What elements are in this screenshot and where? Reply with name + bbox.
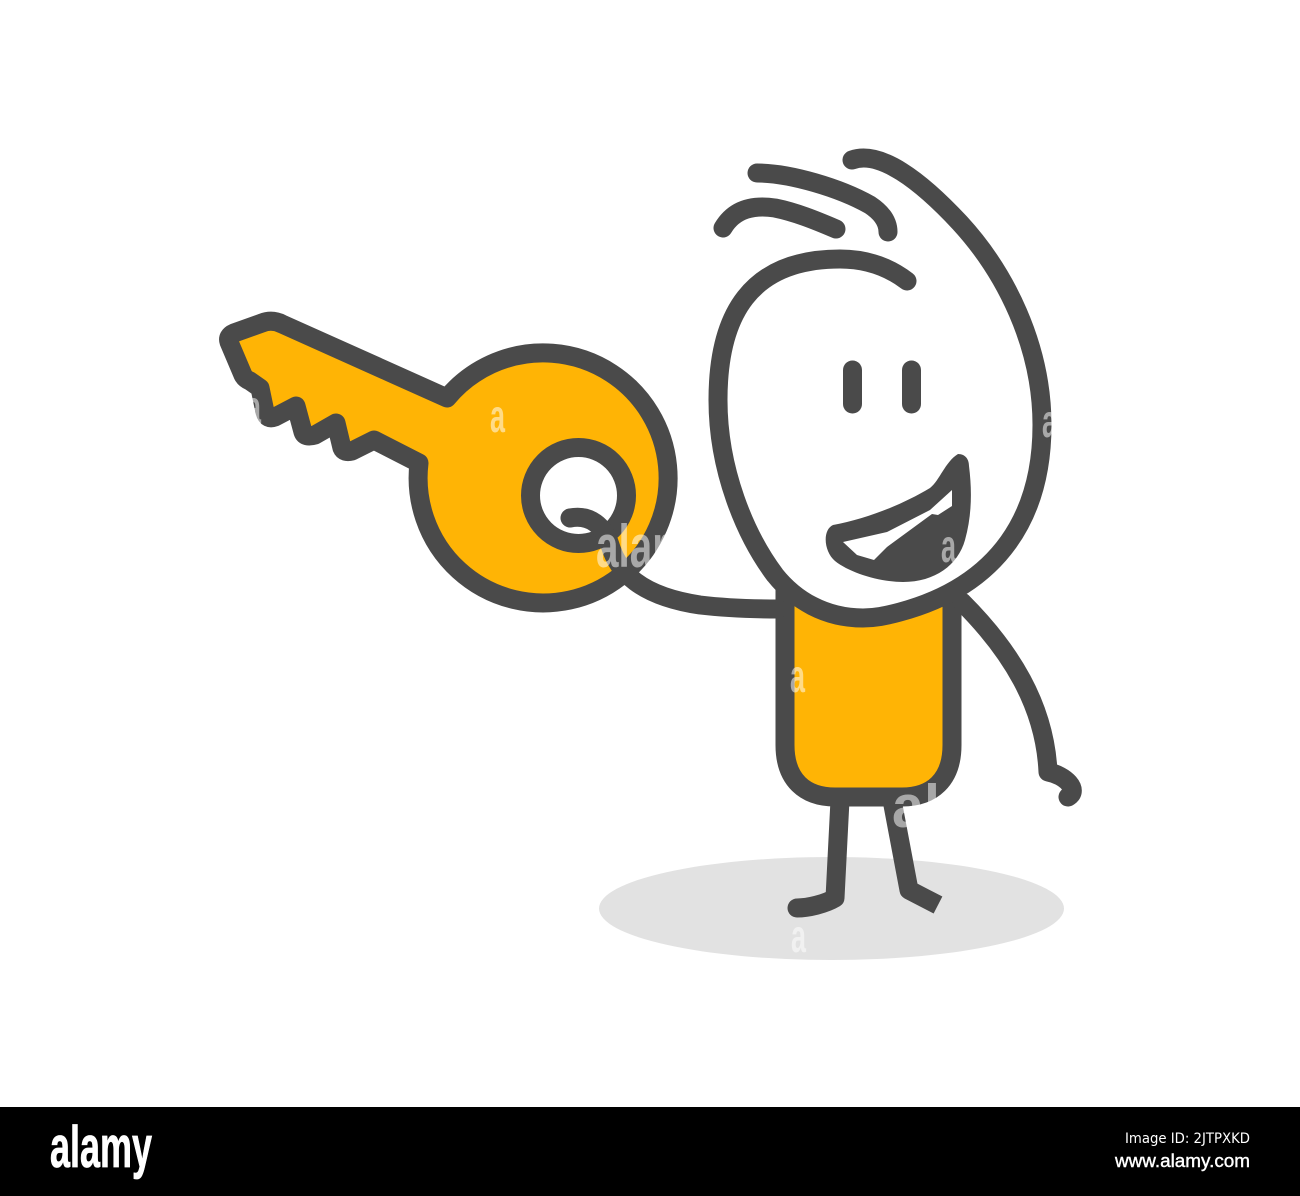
watermark fragments: a [246, 381, 261, 433]
eyes [852, 370, 912, 404]
right arm [962, 602, 1072, 797]
footer bar [0, 1107, 1300, 1196]
key hole [530, 448, 626, 544]
watermark fragments: a [790, 650, 805, 702]
footer logo: alamy [50, 1115, 152, 1180]
watermark fragments [246, 381, 1057, 962]
watermark fragments: alar [596, 513, 668, 580]
ground shadow [599, 857, 1064, 960]
watermark fragments: a [941, 520, 956, 572]
head [718, 158, 1042, 618]
arm holding key [570, 517, 778, 609]
watermark fragments: al [892, 773, 940, 840]
icon: golden key [229, 321, 668, 603]
watermark fragments: a [490, 390, 505, 442]
image id: Image ID: 2JTPXKD [1125, 1131, 1250, 1147]
stick figure [570, 158, 1072, 908]
left leg [797, 800, 840, 908]
hair strands [723, 173, 888, 232]
torso [785, 590, 952, 797]
mouth [826, 454, 971, 582]
website: www.alamy.com [1114, 1150, 1250, 1171]
right leg [892, 800, 938, 905]
watermark fragments: a [1042, 395, 1057, 447]
watermark fragments: a [791, 910, 806, 962]
